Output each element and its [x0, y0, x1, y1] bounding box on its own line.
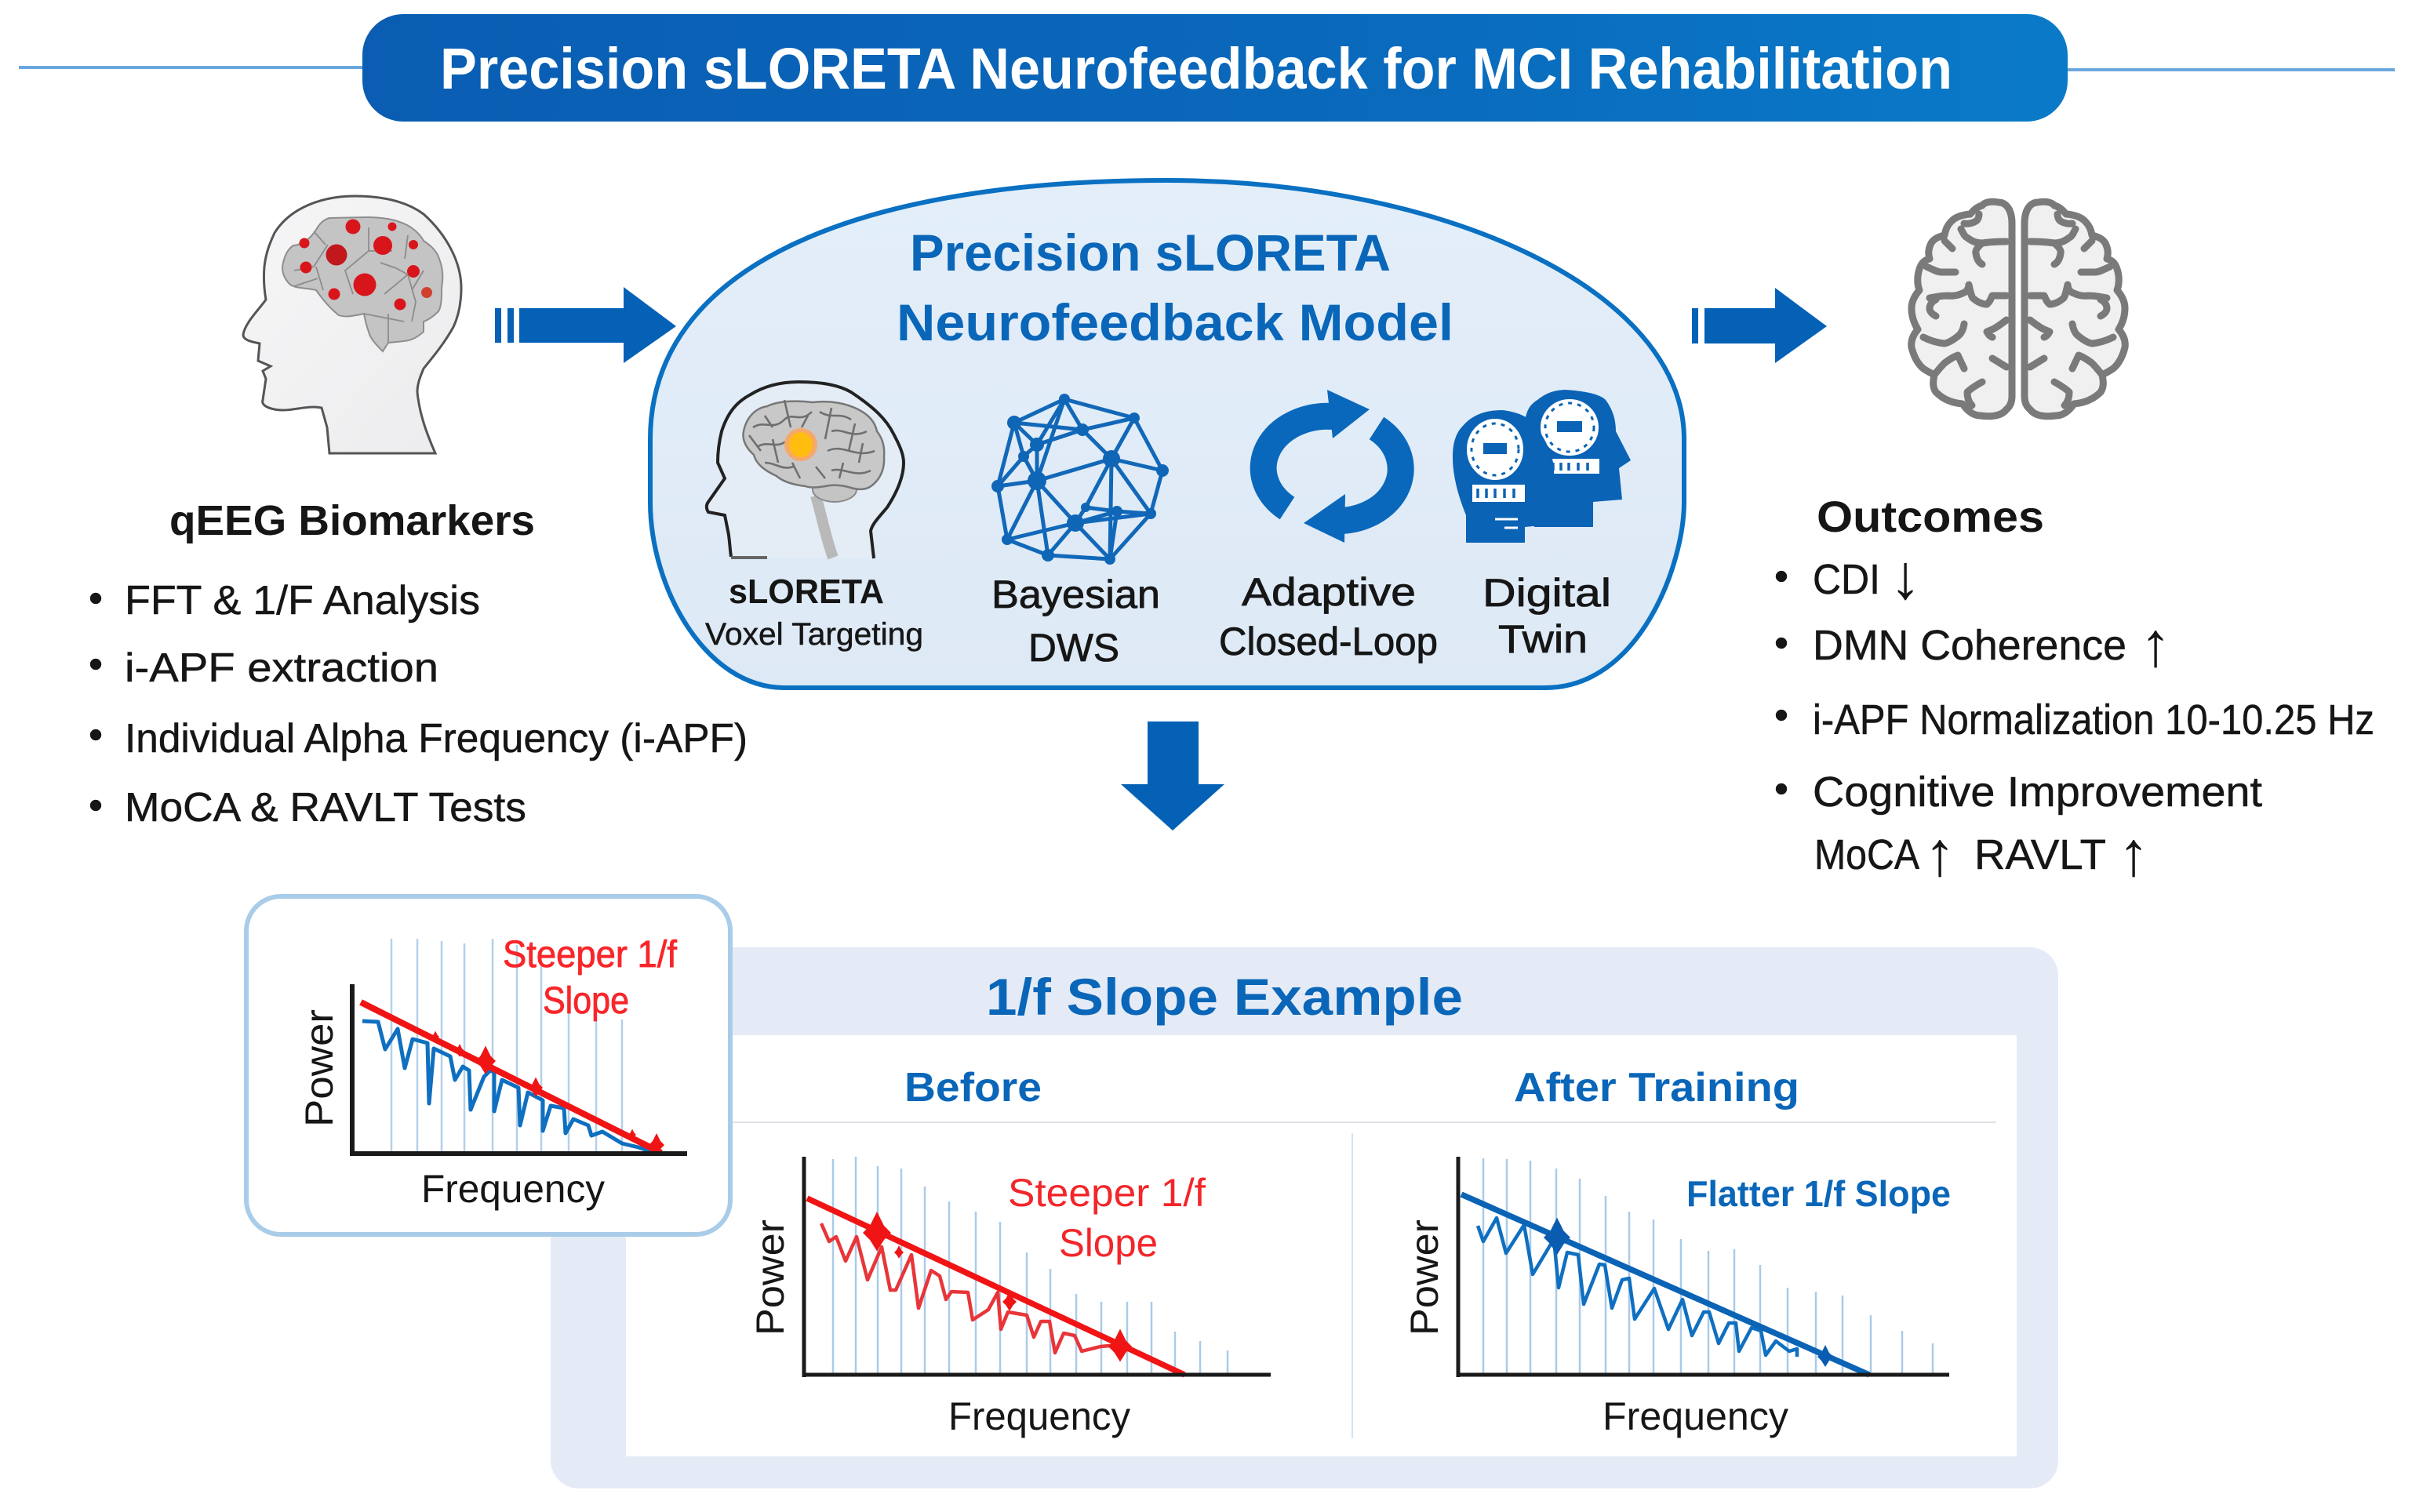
label: Bayesian DWS: [991, 572, 1160, 670]
label: Adaptive Closed-Loop: Adaptive: [1242, 570, 1416, 614]
list: outcomes: ↑: [2140, 609, 2171, 679]
callout: steeper slope inset chart: [246, 896, 730, 1234]
label: sLORETA Voxel Targeting: [705, 572, 923, 652]
icon: adaptive closed-loop arrows: [1264, 390, 1401, 543]
axis label: Power: Power: [297, 1009, 341, 1127]
icon: sLORETA head with voxel target: [707, 382, 904, 558]
left hemisphere: [1912, 202, 2012, 416]
list: qEEG biomarkers: FFT & 1/F Analysis: [125, 578, 480, 623]
panel title: 1/f Slope Example: [986, 968, 1463, 1026]
list: qEEG biomarkers: [90, 578, 748, 831]
label: Bayesian DWS: DWS: [1028, 626, 1119, 670]
list: outcomes: ↑: [2118, 819, 2149, 889]
icon: outcome brain: [1912, 202, 2125, 416]
list: outcomes: ↑: [1924, 819, 1955, 889]
heading: qEEG Biomarkers: qEEG Biomarkers: [169, 497, 535, 544]
model heading: Precision sLORETA: [910, 224, 1391, 282]
panel: precision sLORETA neurofeedback model: [650, 180, 1684, 688]
label: Digital Twin: [1482, 571, 1611, 661]
axis label: Frequency: Frequency: [948, 1394, 1130, 1438]
axis label: Frequency: Frequency: [421, 1167, 605, 1211]
list: qEEG biomarkers: MoCA & RAVLT Tests: [125, 785, 526, 831]
arrow: biomarkers to model: [495, 287, 676, 363]
model heading: [897, 224, 1453, 351]
label: sLORETA Voxel Targeting: Voxel Targeting: [705, 617, 923, 652]
list: outcomes: DMN Coherence: [1813, 622, 2126, 669]
title banner: Precision sLORETA Neurofeedback for MCI Rehabilitation: [440, 36, 1952, 101]
model heading: Neurofeedback Model: [897, 293, 1453, 351]
right hemisphere: [2025, 202, 2125, 416]
annotation: steeper slope: Slope: [1059, 1221, 1158, 1265]
column heading: Before: Before: [904, 1065, 1042, 1110]
annotation: steeper slope: Slope: [543, 980, 629, 1022]
list: outcomes: CDI: [1813, 556, 1880, 603]
list: outcomes: MoCA: [1814, 831, 1919, 878]
label: sLORETA Voxel Targeting: sLORETA: [729, 572, 884, 611]
label: Adaptive Closed-Loop: Closed-Loop: [1219, 620, 1438, 663]
arrow: down to slope example: [1121, 721, 1224, 831]
title banner: [19, 14, 2395, 122]
icon: Bayesian network: [991, 394, 1169, 565]
label: Digital Twin: Digital: [1482, 571, 1611, 615]
annotation: steeper slope: Steeper 1/f: [503, 934, 678, 976]
list: outcomes: RAVLT: [1974, 831, 2106, 878]
annotation: flatter slope: Flatter 1/f Slope: [1686, 1173, 1951, 1214]
list: qEEG biomarkers: i-APF extraction: [125, 645, 438, 691]
icon: digital twin heads: [1453, 390, 1631, 543]
axis label: Power: Power: [1402, 1219, 1446, 1336]
axis label: Power: Power: [748, 1219, 792, 1336]
chart: after training: [1402, 1157, 1951, 1438]
list: qEEG biomarkers: Individual Alpha Frequency (i-APF): [125, 716, 748, 761]
red hotspots: [300, 220, 432, 311]
arrow: model to outcomes: [1692, 288, 1827, 363]
annotation: steeper slope: Steeper 1/f: [1008, 1171, 1206, 1215]
axis label: Frequency: Frequency: [1603, 1394, 1788, 1438]
label: Bayesian DWS: Bayesian: [991, 572, 1160, 616]
annotation: steeper slope: [503, 934, 678, 1022]
chart: before training: [748, 1157, 1271, 1438]
heading: Outcomes: Outcomes: [1817, 492, 2044, 541]
list: outcomes: [1776, 542, 2374, 889]
column heading: After Training: After Training: [1514, 1065, 1799, 1110]
panel: 1/f slope example: [551, 947, 2058, 1488]
icon: head with red qEEG hotspots: [243, 196, 461, 453]
label: Adaptive Closed-Loop: [1219, 570, 1438, 663]
label: Digital Twin: Twin: [1498, 617, 1588, 661]
annotation: steeper slope: [1008, 1171, 1206, 1265]
list: outcomes: ↓: [1890, 542, 1921, 612]
list: outcomes: Cognitive Improvement: [1813, 769, 2262, 816]
brain: [282, 217, 442, 351]
